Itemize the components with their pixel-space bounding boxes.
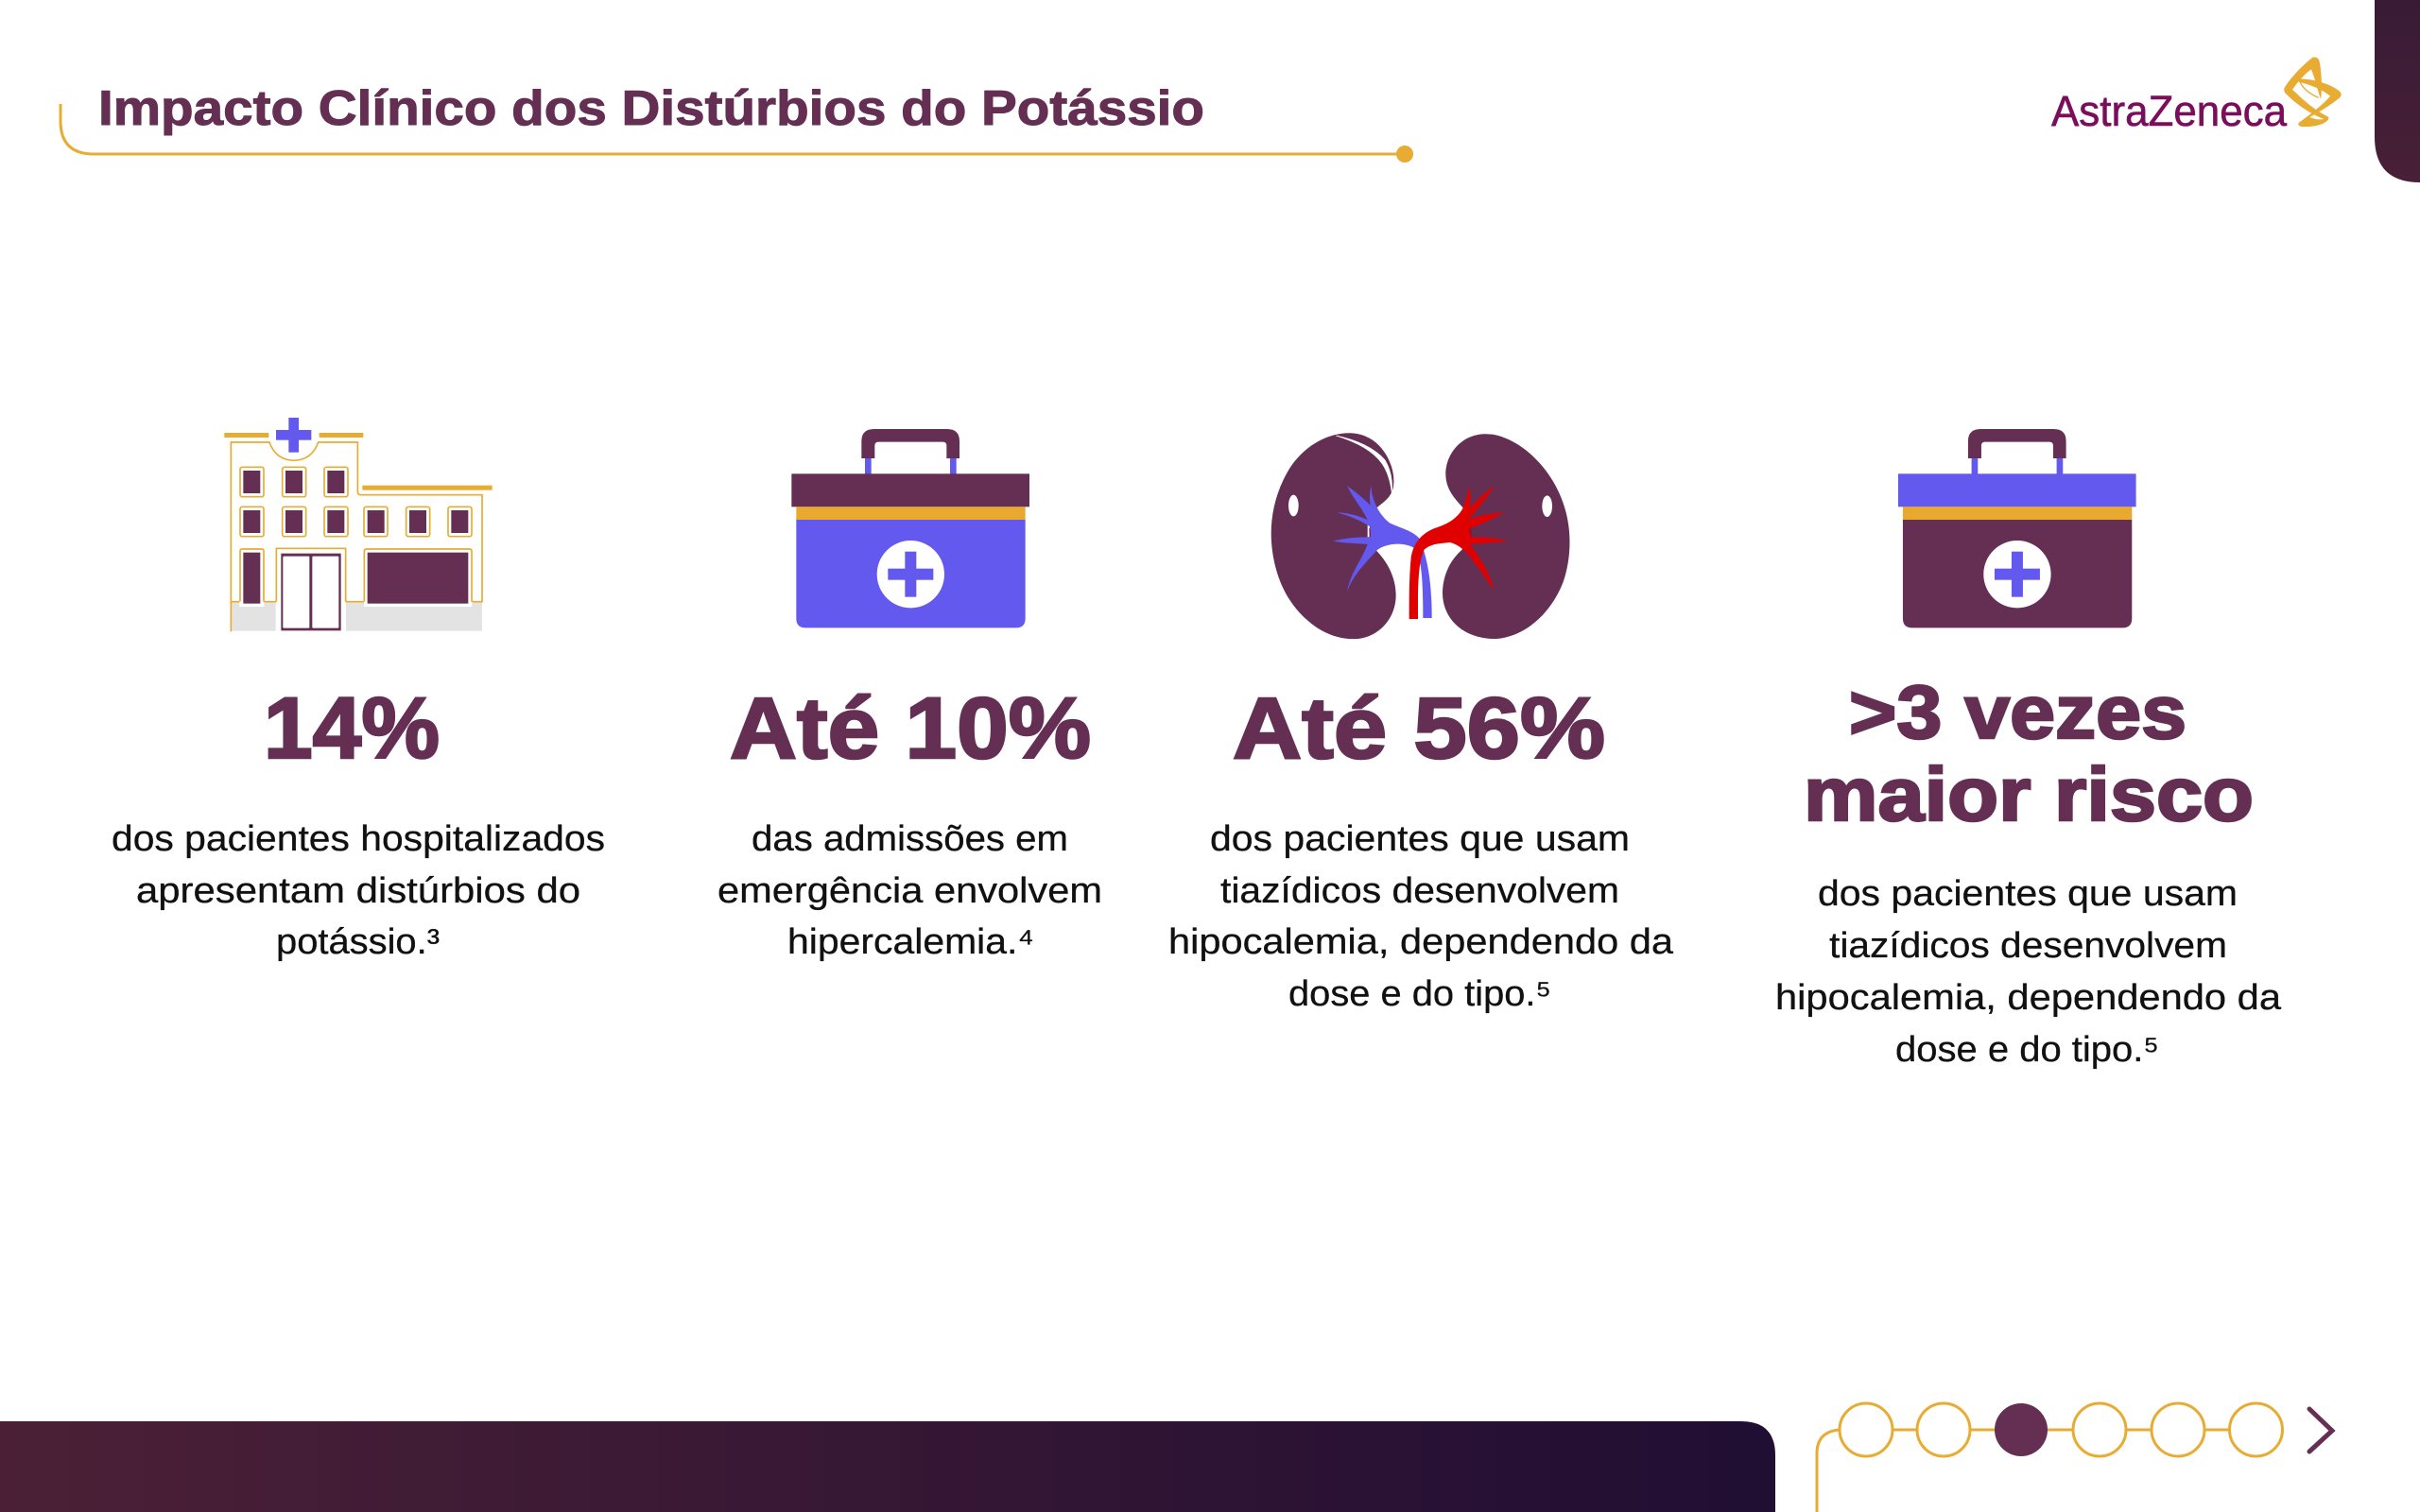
text: hospitalized patients: potássio.³	[276, 922, 440, 962]
text: thiazide patients: dose e do tipo.⁵	[1288, 974, 1551, 1014]
stat: more than 3 times higher risk: maior risco	[1804, 752, 2254, 836]
footer bar	[0, 1421, 1775, 1512]
stat: Até 56%: Até 56%	[1233, 680, 1605, 777]
text: hospitalized patients: dos pacientes hospitalizados	[112, 819, 605, 859]
logo: AstraZeneca: AstraZeneca	[2051, 87, 2288, 135]
text: emergency admissions: das admissões em	[752, 819, 1068, 859]
text: emergency admissions: emergência envolvem	[717, 871, 1102, 911]
icon: first aid kit, dark body	[1898, 429, 2136, 627]
text: thiazide patients: dos pacientes que usam	[1210, 819, 1630, 859]
text: thiazide patients, risk: tiazídicos desenvolvem	[1829, 926, 2227, 966]
text: emergency admissions: hipercalemia.⁴	[787, 922, 1034, 962]
text: thiazide patients: hipocalemia, dependendo da	[1168, 922, 1674, 962]
corner tab	[2375, 0, 2420, 182]
text: hospitalized patients	[112, 819, 605, 962]
text: thiazide patients, risk	[1775, 874, 2282, 1070]
title underline with end dot	[60, 104, 1413, 163]
text: thiazide patients, risk: hipocalemia, dependendo da	[1775, 978, 2282, 1018]
icon: hospital	[224, 418, 493, 631]
stat: Até 10%: Até 10%	[730, 680, 1091, 777]
stat: more than 3 times higher risk	[1804, 670, 2254, 836]
text: thiazide patients, risk: dos pacientes que usam	[1818, 874, 2238, 914]
text: hospitalized patients: apresentam distúrbios do	[136, 871, 580, 911]
stat: 14%: 14%	[264, 680, 440, 777]
icon: first aid kit, blue body	[791, 429, 1029, 627]
icon: kidneys	[1271, 433, 1569, 639]
title: Impacto Clínico dos Distúrbios do Potássio	[98, 81, 1204, 136]
pagination	[1817, 1403, 2282, 1512]
text: thiazide patients	[1168, 819, 1674, 1014]
text: emergency admissions	[717, 819, 1102, 962]
logo: AstraZeneca	[2051, 57, 2342, 135]
stat: more than 3 times higher risk: >3 vezes	[1849, 670, 2187, 754]
text: thiazide patients: tiazídicos desenvolvem	[1220, 871, 1619, 911]
arrow: next	[2309, 1409, 2332, 1452]
text: thiazide patients, risk: dose e do tipo.⁵	[1895, 1030, 2159, 1070]
